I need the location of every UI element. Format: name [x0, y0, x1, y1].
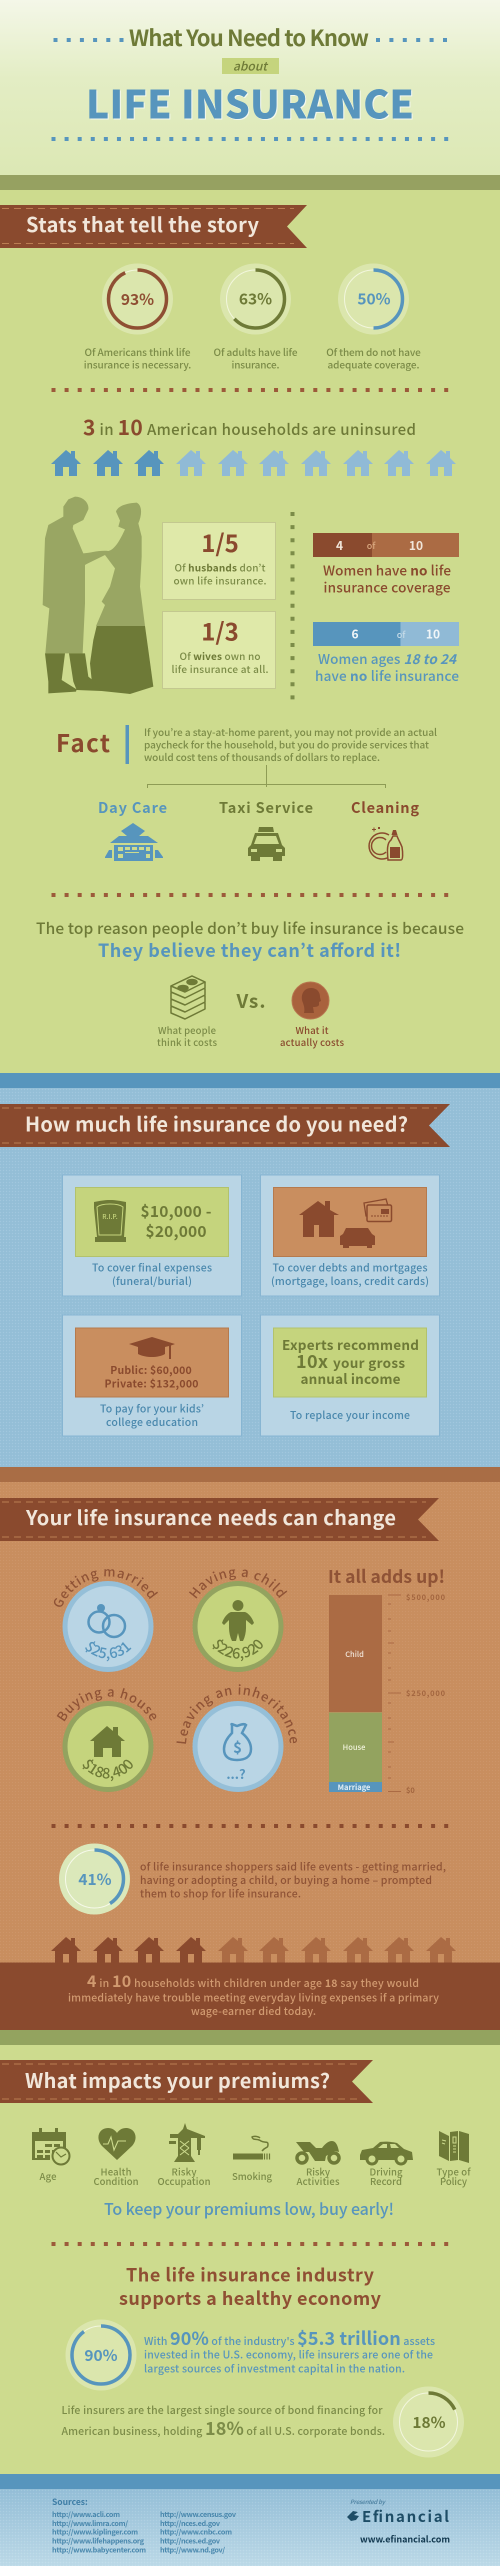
- sources list: http://www.babycenter.com: [52, 2546, 146, 2556]
- text: top reason: The top reason people don’t buy life insurance is because: [36, 917, 464, 939]
- card: replace income: annual income: [300, 1368, 401, 1388]
- band: green divider: [0, 2030, 500, 2045]
- chart: it all adds up: $0: [406, 1785, 415, 1796]
- badge: having a child: Having a child: [189, 1569, 288, 1598]
- band: blue footer divider: [0, 2474, 500, 2489]
- sources list: http://www.limra.com/: [52, 2519, 128, 2529]
- fact text: would cost tens of thousands of dollars to replace.: [144, 749, 380, 764]
- band: brown divider: [0, 1467, 500, 1482]
- sources list: http://www.nd.gov/: [160, 2546, 225, 2556]
- panel: needs can change: [0, 1482, 500, 2030]
- card: final expenses: $20,000: [146, 1220, 206, 1242]
- band: blue divider: [0, 1073, 500, 1088]
- panel: header: [0, 0, 500, 175]
- ribbon heading: needs change: Your life insurance needs can change: [25, 1502, 396, 1531]
- icon: graduation cap: [129, 1337, 175, 1359]
- icon: house: [299, 1201, 339, 1237]
- about tag: about: [233, 58, 269, 74]
- service: cleaning: [351, 797, 419, 860]
- fact accent bar: [126, 725, 129, 764]
- badge: leaving an inheritance: Leaving an inheritance: [176, 1684, 297, 1744]
- stat: 41 percent shoppers: them to shop for life insurance.: [140, 1886, 301, 1902]
- text: buy early: To keep your premiums low, buy early!: [104, 2196, 394, 2220]
- illustration: couple silhouette: [43, 497, 153, 694]
- card: college education: [62, 1315, 242, 1436]
- stat card: 1/3 wives: 1/3: [201, 612, 239, 648]
- badge: buying a house: [56, 1688, 156, 1792]
- chart: it all adds up: [328, 1564, 446, 1796]
- sources list: http://www.lifehappens.org: [52, 2537, 145, 2547]
- heading: healthy economy: supports a healthy economy: [119, 2285, 382, 2311]
- caption: what people think it costs: [157, 1023, 217, 1049]
- icon: gravestone: [94, 1200, 126, 1242]
- stat: 90 percent invested: [66, 2320, 435, 2390]
- stat: 63 percent: insurance.: [232, 356, 280, 372]
- about tag: [222, 58, 279, 74]
- card: college education: Public: $60,000: [110, 1363, 192, 1378]
- icon: car: [340, 1228, 375, 1248]
- text: they believe: They believe they can’t afford it!: [98, 937, 401, 963]
- sources list: [52, 2496, 237, 2556]
- factor: risky occupation: Occupation: [158, 2174, 211, 2188]
- bar: 6 of 10 women 18 to 24: of: [397, 628, 406, 641]
- factor: type of policy: Policy: [440, 2174, 468, 2188]
- connector: [148, 765, 386, 788]
- bar: 4 of 10 women: 10: [409, 537, 423, 554]
- title: Life Insurance: LIFE INSURANCE: [86, 74, 414, 130]
- fact text: [144, 724, 437, 764]
- band: olive divider: [0, 175, 500, 190]
- factor: age: Age: [40, 2169, 56, 2183]
- heading: 3 in 10 households: 3 in 10 American households are uninsured: [83, 412, 416, 442]
- sources list: Sources:: [52, 2496, 88, 2508]
- factor: driving record: Record: [370, 2174, 402, 2188]
- factor: health condition: Condition: [94, 2174, 139, 2188]
- ribbon heading: premiums: What impacts your premiums?: [25, 2065, 330, 2094]
- factor: risky activities: Risky: [306, 2164, 331, 2178]
- sources list: http://nces.ed.gov: [160, 2537, 221, 2547]
- stat: 41 percent shoppers: of life insurance shoppers said life events - getting married,: [140, 1860, 446, 1874]
- ribbon heading: stats: Stats that tell the story: [26, 209, 260, 238]
- stat: 93 percent: [84, 264, 191, 372]
- sources list: http://nces.ed.gov: [160, 2519, 221, 2529]
- badge: buying a house: Buying a house: [56, 1688, 156, 1722]
- factor: health condition: [94, 2128, 139, 2188]
- badge: having a child: $226,920: [212, 1639, 263, 1662]
- badge: buying a house: $188,400: [82, 1759, 133, 1782]
- card: final expenses: (funeral/burial): [112, 1274, 192, 1289]
- icon: credit cards: [364, 1199, 392, 1222]
- stat: 90 percent invested: largest sources of investment capital in the nation.: [144, 2362, 405, 2376]
- factor: driving record: Driving: [370, 2164, 403, 2178]
- bar: 6 of 10 women 18 to 24: 10: [426, 626, 440, 642]
- card: replace income: your gross: [333, 1352, 405, 1372]
- card: replace income: 10x: [296, 1348, 328, 1374]
- stat card: 1/5 husbands: 1/5: [201, 524, 239, 559]
- caption: what it actually costs: [280, 1023, 344, 1049]
- chart: it all adds up: $250,000: [406, 1688, 446, 1699]
- badge: having a child: [189, 1569, 288, 1672]
- ribbon heading: premiums: [0, 2060, 373, 2103]
- stat: 18 percent bonds: American business, holding 18% of all U.S. corporate bonds.: [62, 2415, 385, 2441]
- ribbon heading: how much: [0, 1104, 450, 1147]
- bar: 4 of 10 women: of: [367, 539, 376, 552]
- bar: 6 of 10 women 18 to 24: [313, 622, 459, 685]
- band: 4 in 10 households: wage-earner died today.: [191, 2004, 316, 2019]
- factor: type of policy: [436, 2131, 471, 2188]
- logo: Efinancial: [347, 2497, 450, 2546]
- text: Vs.: Vs.: [236, 987, 266, 1014]
- stat card: 1/3 wives: [162, 612, 276, 688]
- stat: 18 percent bonds: 18%: [412, 2411, 446, 2433]
- sources list: http://www.acli.com: [52, 2510, 120, 2520]
- panel: stats that tell the story: [0, 190, 500, 1073]
- fact heading: Fact: [56, 724, 110, 759]
- stat card: 1/3 wives: life insurance at all.: [172, 661, 269, 676]
- service: day care: Day Care: [98, 797, 167, 818]
- bar: 6 of 10 women 18 to 24: Women ages 18 to 24: [318, 648, 457, 668]
- stat: 93 percent: 93%: [121, 288, 154, 310]
- stat: 93 percent: Of Americans think life: [84, 344, 191, 359]
- factor: smoking: Smoking: [232, 2169, 272, 2183]
- card: debts and mortgages: To cover debts and mortgages: [272, 1260, 428, 1276]
- icon: penny coin: [292, 982, 329, 1019]
- icon: gravestone: R.I.P.: [102, 1211, 118, 1221]
- stat: 63 percent: 63%: [239, 288, 272, 310]
- panel: footer: [0, 2489, 500, 2566]
- logo: Efinancial: Efinancial: [362, 2506, 449, 2527]
- heading: healthy economy: The life insurance industry: [126, 2262, 375, 2288]
- fact text: If you’re a stay-at-home parent, you may not provide an actual: [144, 724, 437, 739]
- chart: it all adds up: It all adds up!: [328, 1564, 445, 1589]
- band: 4 in 10 households: 4 in 10 households with children under age 18 say they would: [87, 1968, 419, 1992]
- stat card: 1/5 husbands: [162, 522, 276, 600]
- stat: 41 percent shoppers: [59, 1844, 446, 1914]
- chart: it all adds up: $500,000: [406, 1592, 446, 1603]
- service: taxi: Taxi Service: [219, 797, 313, 818]
- ribbon heading: how much: How much life insurance do you need?: [25, 1108, 408, 1138]
- factor: risky activities: [296, 2141, 340, 2188]
- stat: 93 percent: insurance is necessary.: [84, 356, 191, 372]
- badge: getting married: [54, 1569, 158, 1672]
- title dots right: [376, 38, 447, 42]
- factor: type of policy: Type of: [436, 2164, 471, 2178]
- bar: 4 of 10 women: insurance coverage: [324, 576, 451, 596]
- card: replace income: To replace your income: [290, 1408, 410, 1423]
- factor: risky occupation: Risky: [172, 2164, 197, 2178]
- card: final expenses: $10,000 -: [140, 1200, 212, 1222]
- band: 4 in 10 households: [0, 1962, 500, 2030]
- caption: what people think it costs: think it costs: [157, 1035, 217, 1049]
- stat: 50 percent: adequate coverage.: [328, 356, 420, 372]
- stat: 18 percent bonds: Life insurers are the largest single source of bond financing for: [62, 2403, 383, 2418]
- title dots left: [54, 38, 124, 42]
- icon: money stack: [171, 976, 205, 1019]
- chart: it all adds up: Child: [345, 1649, 364, 1660]
- factor: smoking: [232, 2136, 272, 2183]
- title: What You Need to Know: What You Need to Know: [129, 21, 369, 53]
- factor: risky activities: Activities: [296, 2174, 340, 2188]
- stat: 50 percent: Of them do not have: [326, 344, 421, 359]
- logo: Efinancial: Presented by: [350, 2497, 387, 2506]
- stat: 63 percent: Of adults have life: [214, 344, 298, 359]
- bar: 4 of 10 women: [313, 533, 459, 596]
- bar: 4 of 10 women: Women have no life: [323, 560, 451, 580]
- badge: leaving an inheritance: [176, 1684, 297, 1792]
- factor: driving record: [360, 2142, 413, 2188]
- stat: 50 percent: [326, 264, 421, 372]
- logo: Efinancial: www.efinancial.com: [360, 2532, 450, 2546]
- houses: 3 of 10: [51, 450, 456, 476]
- stat: 90 percent invested: invested in the U.S. economy, life insurers are one of the: [144, 2348, 433, 2362]
- caption: what it actually costs: actually costs: [280, 1035, 344, 1049]
- panel: what impacts premiums: [0, 2045, 500, 2474]
- houses: 4 of 10: [51, 1937, 456, 1963]
- bar: 6 of 10 women 18 to 24: 6: [351, 626, 359, 642]
- fact text: paycheck for the household, but you do provide services that: [144, 736, 429, 752]
- service: day care: [98, 797, 167, 861]
- card: replace income: [260, 1315, 440, 1436]
- band: 4 in 10 households: immediately have trouble meeting everyday living expenses if a primary: [68, 1990, 439, 2006]
- caption: what people think it costs: What people: [158, 1023, 216, 1037]
- badge: leaving an inheritance: $: [233, 1737, 242, 1758]
- bar: 6 of 10 women 18 to 24: have no life insurance: [315, 665, 459, 685]
- stat: 90 percent invested: 90%: [84, 2344, 118, 2366]
- sources list: http://www.census.gov: [160, 2510, 237, 2520]
- badge: getting married: $25,631: [85, 1641, 132, 1662]
- stat: 50 percent: 50%: [357, 288, 391, 310]
- stat card: 1/5 husbands: own life insurance.: [174, 572, 267, 588]
- stat: 41 percent shoppers: having or adopting a child, or buying a home – prompted: [140, 1873, 432, 1888]
- caption: what it actually costs: What it: [296, 1023, 329, 1037]
- stat card: 1/3 wives: Of wives own no: [180, 648, 260, 663]
- stat: 63 percent: [214, 264, 298, 372]
- sources list: http://www.kiplinger.com: [52, 2528, 138, 2538]
- title: Life Insurance: LIFE INSURANCE: [87, 76, 415, 132]
- service: taxi: [219, 797, 313, 861]
- factor: risky occupation: [158, 2123, 211, 2188]
- card: debts and mortgages: [260, 1175, 440, 1296]
- card: replace income: Experts recommend: [282, 1334, 419, 1354]
- ribbon heading: stats: [0, 205, 307, 248]
- service: cleaning: Cleaning: [351, 797, 419, 818]
- bar: 4 of 10 women: 4: [336, 537, 343, 554]
- card: final expenses: To cover final expenses: [92, 1260, 212, 1276]
- sources list: http://www.cnbc.com: [160, 2528, 232, 2538]
- chart: it all adds up: House: [343, 1742, 365, 1753]
- panel: how much life insurance: [0, 1088, 500, 1467]
- stat card: 1/5 husbands: Of husbands don’t: [174, 560, 266, 574]
- chart: it all adds up: Marriage: [338, 1782, 371, 1793]
- stat: 90 percent invested: With 90% of the industry's $5.3 trillion assets: [144, 2325, 435, 2351]
- card: college education: To pay for your kids’: [100, 1402, 204, 1416]
- stat: 18 percent bonds: [62, 2386, 464, 2458]
- ribbon heading: needs change: [0, 1498, 439, 1541]
- factor: health condition: Health: [100, 2164, 132, 2178]
- badge: getting married: Getting married: [54, 1569, 158, 1607]
- stat: 41 percent shoppers: 41%: [78, 1868, 112, 1890]
- card: college education: Private: $132,000: [104, 1376, 198, 1392]
- card: college education: college education: [106, 1415, 198, 1430]
- factor: age: [32, 2128, 70, 2183]
- card: final expenses: [62, 1175, 242, 1296]
- card: debts and mortgages: (mortgage, loans, credit cards): [271, 1274, 429, 1289]
- heading: healthy economy: [119, 2262, 382, 2311]
- badge: leaving an inheritance: ...?: [226, 1764, 246, 1783]
